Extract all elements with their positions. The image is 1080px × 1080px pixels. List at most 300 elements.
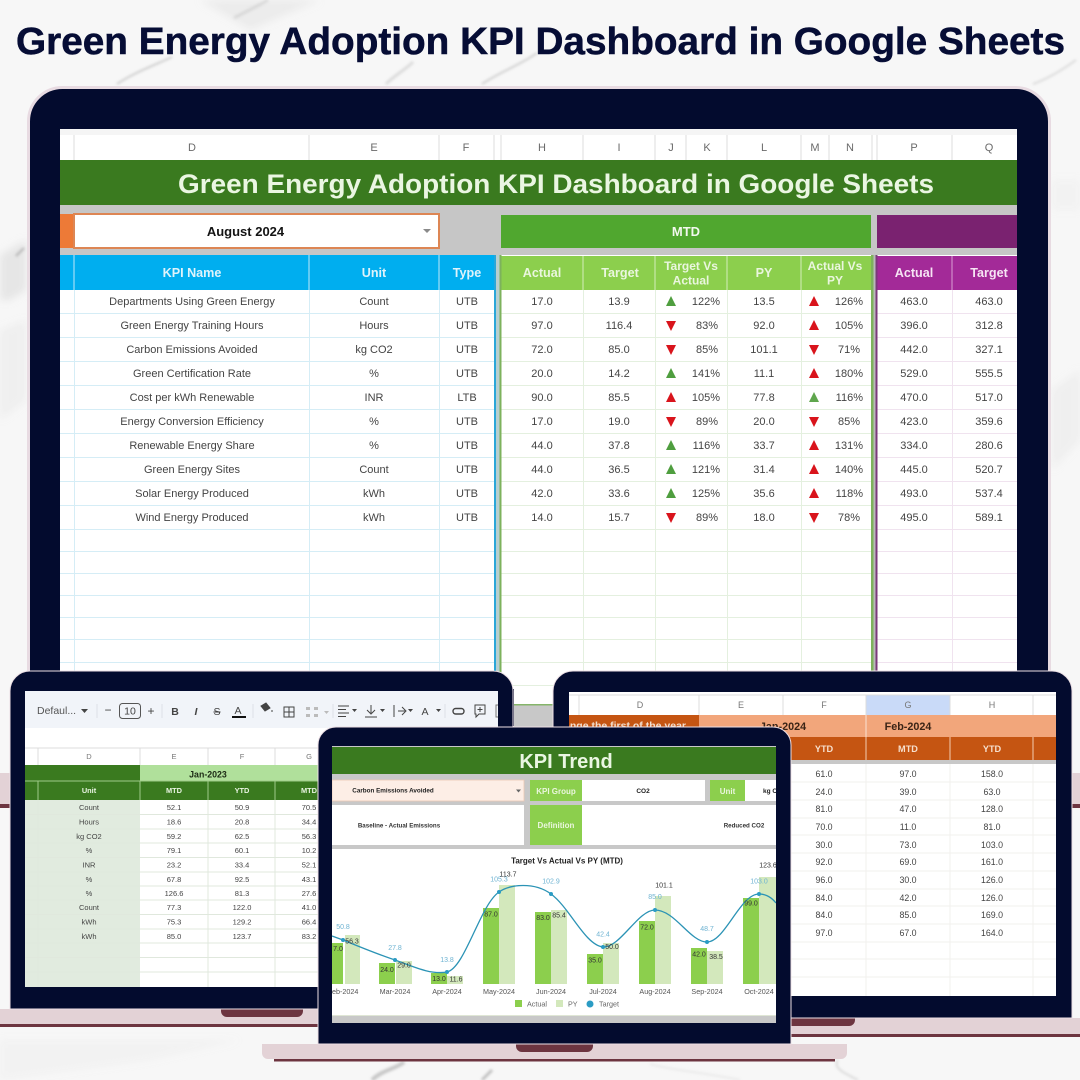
Jan YTD values: 60.1 xyxy=(235,846,249,855)
Feb YTD values: 158.0 xyxy=(981,769,1003,779)
target vs actual arrows xyxy=(666,296,676,523)
MTD actual column: 90.0 xyxy=(531,392,553,404)
KPI header xyxy=(60,255,495,290)
target vs actual percentages: 85% xyxy=(696,344,718,356)
actual vs PY percentages: 105% xyxy=(835,320,863,332)
actual and PY data labels: 123.6 xyxy=(759,862,777,870)
spreadsheet toolbar: S xyxy=(213,706,221,718)
target data labels xyxy=(336,876,768,964)
target line xyxy=(332,886,776,974)
unit values: kg CO2 xyxy=(76,832,102,841)
next month values: 56.3 xyxy=(302,832,316,841)
right laptop base xyxy=(775,1012,1080,1037)
KPI trend banner xyxy=(332,747,776,774)
MTD actual column: 42.0 xyxy=(531,488,553,500)
Feb MTD values: 47.0 xyxy=(899,804,917,814)
Jan MTD values: 77.3 xyxy=(167,903,181,912)
MTD target column: 33.6 xyxy=(608,488,630,500)
Jan MTD values: 18.6 xyxy=(167,818,181,826)
unit column: kg CO2 xyxy=(355,344,393,356)
actual bars xyxy=(332,898,759,984)
month axis labels: Jul-2024 xyxy=(589,987,617,996)
type column: UTB xyxy=(456,344,478,356)
laptop base strip behind main laptop xyxy=(0,773,1080,808)
chart legend xyxy=(515,1000,619,1008)
column letters row: I xyxy=(617,142,621,154)
PY bars xyxy=(345,877,776,984)
actual vs PY percentages: 118% xyxy=(836,488,863,500)
column letters: G xyxy=(306,752,312,761)
KPI names column: Cost per kWh Renewable xyxy=(130,392,254,404)
definition field: Definition xyxy=(538,821,575,830)
type column: UTB xyxy=(456,512,478,524)
actual and PY data labels: 99.0 xyxy=(744,900,758,908)
right table body xyxy=(569,764,1056,996)
left laptop xyxy=(10,671,513,1009)
unit field: kg CO2 xyxy=(763,788,786,795)
Feb YTD values: 81.0 xyxy=(983,822,1001,832)
MTD target column: 116.4 xyxy=(606,320,632,332)
PY column: 33.7 xyxy=(753,440,775,452)
spreadsheet toolbar: 10 xyxy=(124,706,136,718)
actual and PY data labels: 72.0 xyxy=(640,924,654,932)
KPI names column: Carbon Emissions Avoided xyxy=(126,344,258,356)
right bezel xyxy=(553,671,1072,1018)
PY column: 13.5 xyxy=(753,296,775,308)
MTD target column xyxy=(606,296,632,524)
KPI header: Unit xyxy=(362,266,387,280)
unit column: kWh xyxy=(363,488,385,500)
YTD header: Actual xyxy=(895,266,933,280)
type column xyxy=(456,296,478,524)
KPI group field: KPI Group xyxy=(536,787,576,796)
chart legend: Target xyxy=(599,1000,619,1008)
Jan YTD values: 30.0 xyxy=(815,840,833,850)
Jan YTD values: 123.7 xyxy=(233,932,251,941)
month header xyxy=(699,715,1056,737)
main laptop xyxy=(28,88,1050,729)
unit values: % xyxy=(86,889,93,898)
YTD actual column: 334.0 xyxy=(900,440,928,452)
Jan MTD values: 52.1 xyxy=(167,803,181,812)
target data labels: 42.4 xyxy=(596,932,610,938)
actual and PY data labels: 35.0 xyxy=(588,958,602,964)
type column: UTB xyxy=(456,416,478,428)
YTD actual column: 396.0 xyxy=(900,320,928,332)
Feb MTD values: 85.0 xyxy=(899,910,917,920)
actual vs PY percentages: 78% xyxy=(838,512,860,524)
unit values: Count xyxy=(79,803,100,812)
actual vs PY arrows xyxy=(809,296,819,523)
YTD actual column: 423.0 xyxy=(900,416,928,428)
YTD target column: 359.6 xyxy=(975,416,1003,428)
spreadsheet toolbar: Defaul... xyxy=(37,705,76,717)
type column: UTB xyxy=(456,440,478,452)
left table body xyxy=(25,800,318,987)
actual and PY data labels: 87.0 xyxy=(484,912,498,918)
main bezel xyxy=(28,88,1050,728)
KPI names column: Wind Energy Produced xyxy=(135,512,249,524)
unit column: INR xyxy=(365,392,384,404)
target data labels: 105.3 xyxy=(490,876,508,884)
column letters: F xyxy=(821,700,827,710)
KPI names column: Renewable Energy Share xyxy=(129,440,255,452)
chart legend: Actual xyxy=(527,1000,547,1008)
column header: Unit xyxy=(82,786,97,795)
actual vs PY percentages xyxy=(835,296,863,524)
page title: Green Energy Adoption KPI Dashboard in Google Sheets xyxy=(16,21,1065,63)
Feb MTD values: 67.0 xyxy=(899,928,917,938)
KPI group field: CO2 xyxy=(636,788,650,795)
actual and PY data labels: 42.0 xyxy=(692,952,706,958)
MTD target column: 19.0 xyxy=(608,416,630,428)
target vs actual percentages: 105% xyxy=(692,392,720,404)
target vs actual percentages: 141% xyxy=(692,368,720,380)
MTD target column: 85.5 xyxy=(608,392,630,404)
column header: MTD xyxy=(166,786,183,795)
MTD actual column: 17.0 xyxy=(531,416,553,428)
Jan MTD values: 23.2 xyxy=(167,860,181,870)
trend chart xyxy=(328,849,777,1016)
definition field: Reduced CO2 xyxy=(724,822,765,830)
actual and PY data labels: 24.0 xyxy=(380,967,394,974)
Jan YTD values: 92.5 xyxy=(235,875,249,884)
month axis labels: Mar-2024 xyxy=(380,987,410,996)
Jan YTD values: 81.3 xyxy=(235,889,249,898)
Feb MTD values: 97.0 xyxy=(899,769,917,779)
orange note cell: ange the first of the year xyxy=(564,720,686,732)
MTD target column: 85.0 xyxy=(608,344,630,356)
formula cell: Baseline - Actual Emissions xyxy=(358,822,441,830)
YTD target column: 589.1 xyxy=(975,512,1003,524)
Feb MTD values: 73.0 xyxy=(899,840,917,850)
PY column: 77.8 xyxy=(753,392,775,404)
actual and PY data labels: 13.0 xyxy=(432,976,446,983)
column letters: E xyxy=(738,700,744,710)
type column: UTB xyxy=(456,488,478,500)
actual and PY data labels: 29.0 xyxy=(397,962,411,970)
column letters row: P xyxy=(910,142,918,154)
type column: UTB xyxy=(456,368,478,380)
MTD header: Actual Vs xyxy=(808,259,863,273)
left screen sheet xyxy=(25,691,500,987)
month axis labels: Sep-2024 xyxy=(691,987,723,996)
actual vs PY percentages: 71% xyxy=(838,344,860,356)
column letters xyxy=(25,748,318,765)
YTD target column: 555.5 xyxy=(975,368,1003,380)
target data labels: 27.8 xyxy=(388,945,402,952)
KPI trend banner: KPI Trend xyxy=(519,751,613,773)
KPI trend screen xyxy=(328,746,786,1023)
column header: MTD xyxy=(301,786,318,795)
MTD actual column: 20.0 xyxy=(531,368,553,380)
column header: YTD xyxy=(815,744,834,754)
unit values: kWh xyxy=(82,918,96,926)
Feb YTD values: 126.0 xyxy=(981,893,1003,903)
column letters row: J xyxy=(668,142,674,154)
Feb YTD values: 126.0 xyxy=(981,875,1003,885)
left laptop base xyxy=(0,1003,330,1027)
month axis labels xyxy=(328,987,774,996)
target data labels: 48.7 xyxy=(700,926,714,933)
MTD band xyxy=(501,215,871,248)
actual and PY data labels: 83.0 xyxy=(536,915,550,922)
Jan MTD values: 126.6 xyxy=(165,889,183,898)
actual and PY data labels: 56.3 xyxy=(345,938,359,946)
Jan YTD values: 61.0 xyxy=(815,769,833,779)
target data labels: 50.8 xyxy=(336,924,350,931)
KPI names column: Solar Energy Produced xyxy=(135,488,249,500)
actual vs PY percentages: 116% xyxy=(836,392,863,404)
month axis labels: Feb-2024 xyxy=(328,987,358,996)
MTD header xyxy=(501,256,871,290)
PY column: 20.0 xyxy=(753,416,775,428)
actual vs PY percentages: 85% xyxy=(838,416,860,428)
KPI header: Type xyxy=(453,266,481,280)
unit field: Unit xyxy=(720,787,736,796)
Feb YTD values: 164.0 xyxy=(981,928,1003,938)
center bezel xyxy=(318,727,791,1044)
Feb MTD values: 42.0 xyxy=(899,893,917,903)
YTD actual column: 493.0 xyxy=(900,488,928,500)
column letters xyxy=(569,695,1056,715)
MTD target column: 14.2 xyxy=(608,368,630,380)
next month values: 83.2 xyxy=(302,932,316,941)
column letters row: H xyxy=(538,142,546,154)
MTD header: Target Vs xyxy=(664,259,718,273)
Feb MTD values: 30.0 xyxy=(899,875,917,885)
YTD actual column: 495.0 xyxy=(900,512,928,524)
target data labels: 13.8 xyxy=(440,957,454,964)
type column: UTB xyxy=(456,464,478,476)
month axis labels: Apr-2024 xyxy=(432,987,462,996)
KPI names column xyxy=(109,296,275,524)
PY column: 35.6 xyxy=(753,488,775,500)
unit column: % xyxy=(369,368,379,380)
MTD header: Actual xyxy=(673,274,709,288)
unit column: % xyxy=(369,416,379,428)
KPI group field xyxy=(530,780,705,801)
column letters row: Q xyxy=(985,142,994,154)
Jan YTD values xyxy=(815,769,833,938)
PY column: 92.0 xyxy=(753,320,775,332)
type column: UTB xyxy=(456,320,478,332)
month selector xyxy=(60,214,439,248)
right screen sheet xyxy=(564,692,1056,996)
Jan MTD values: 67.8 xyxy=(167,875,181,884)
actual and PY data labels: 85.4 xyxy=(552,912,566,920)
KPI names column: Green Certification Rate xyxy=(133,368,251,380)
YTD actual column: 463.0 xyxy=(900,296,928,308)
Jan YTD values xyxy=(233,803,251,941)
MTD actual column: 72.0 xyxy=(531,344,553,356)
target vs actual percentages: 125% xyxy=(692,488,720,500)
month axis labels: Oct-2024 xyxy=(744,987,774,996)
Jan YTD values: 96.0 xyxy=(815,875,833,885)
YTD header: Target xyxy=(970,266,1009,280)
unit values: % xyxy=(86,846,93,855)
Jan YTD values: 129.2 xyxy=(233,918,251,926)
column header: YTD xyxy=(235,786,250,795)
target vs actual percentages: 121% xyxy=(692,464,720,476)
MTD actual column: 44.0 xyxy=(531,464,553,476)
column letters: H xyxy=(989,700,995,710)
Feb MTD values: 11.0 xyxy=(900,822,916,832)
target data labels: 103.0 xyxy=(750,878,768,886)
MTD target column: 15.7 xyxy=(608,512,630,524)
target vs actual percentages xyxy=(692,296,720,524)
target vs actual percentages: 116% xyxy=(693,440,720,452)
next month values: 43.1 xyxy=(302,875,316,884)
right laptop xyxy=(553,671,1072,1018)
center laptop xyxy=(318,727,791,1044)
actual and PY data labels: 38.5 xyxy=(709,954,723,961)
YTD actual column: 529.0 xyxy=(900,368,928,380)
actual vs PY percentages: 140% xyxy=(835,464,863,476)
next month values: 52.1 xyxy=(302,860,316,870)
unit column: % xyxy=(369,440,379,452)
unit field xyxy=(710,780,786,801)
type column: UTB xyxy=(456,296,478,308)
column letters row: M xyxy=(810,142,820,154)
unit values: kWh xyxy=(82,932,96,941)
column letters: D xyxy=(637,700,644,710)
month axis labels: May-2024 xyxy=(483,987,515,996)
month axis labels: Jun-2024 xyxy=(536,987,566,996)
YTD target column: 520.7 xyxy=(975,464,1003,476)
next month values: 27.6 xyxy=(302,889,316,898)
KPI selector: Carbon Emissions Avoided xyxy=(352,788,434,794)
unit column: kWh xyxy=(363,512,385,524)
MTD actual column: 97.0 xyxy=(531,320,553,332)
unit values: % xyxy=(86,875,93,884)
MTD actual column xyxy=(531,296,553,524)
column letters row: E xyxy=(370,142,378,154)
column letters: D xyxy=(86,752,92,761)
month header: Feb-2024 xyxy=(885,721,931,733)
Jan YTD values: 20.8 xyxy=(235,818,249,826)
MTD actual column: 17.0 xyxy=(531,296,553,308)
Jan YTD values: 50.9 xyxy=(235,803,249,812)
unit column: Hours xyxy=(359,320,389,332)
chart legend: PY xyxy=(568,1000,578,1008)
target data labels: 102.9 xyxy=(542,878,560,886)
next month values: 70.5 xyxy=(302,803,316,812)
column header: MTD xyxy=(731,744,751,754)
KPI names column: Green Energy Training Hours xyxy=(120,320,264,332)
type column: LTB xyxy=(457,392,477,404)
column letters row: K xyxy=(703,142,711,154)
month header: Jan-2023 xyxy=(189,770,227,780)
unit values: Count xyxy=(79,903,100,912)
MTD actual column: 44.0 xyxy=(531,440,553,452)
month header xyxy=(25,765,318,780)
actual vs PY percentages: 126% xyxy=(835,296,863,308)
column header: YTD xyxy=(983,744,1002,754)
MTD target column: 36.5 xyxy=(608,464,630,476)
KPI names column: Energy Conversion Efficiency xyxy=(120,416,264,428)
column letters: G xyxy=(904,700,912,710)
chart title: Target Vs Actual Vs PY (MTD) xyxy=(511,856,623,866)
PY column: 11.1 xyxy=(754,368,774,380)
column header xyxy=(790,737,1056,760)
grid lines xyxy=(60,290,1017,690)
spreadsheet toolbar xyxy=(25,691,500,728)
center laptop base xyxy=(262,1038,847,1062)
next month values: 41.0 xyxy=(302,903,316,912)
YTD target column xyxy=(975,296,1003,524)
column letters row: F xyxy=(463,142,470,154)
actual and PY data labels: 113.7 xyxy=(500,872,517,878)
YTD target column: 463.0 xyxy=(975,296,1003,308)
actual and PY data labels: 50.0 xyxy=(605,944,619,951)
KPI names column: Departments Using Green Energy xyxy=(109,296,275,308)
Feb MTD values: 39.0 xyxy=(899,787,917,797)
Feb YTD values xyxy=(981,769,1003,938)
Jan YTD values: 122.0 xyxy=(233,903,251,912)
Jan YTD values: 70.0 xyxy=(815,822,833,832)
column header xyxy=(25,780,318,800)
target vs actual percentages: 89% xyxy=(696,416,718,428)
unit values: Hours xyxy=(79,818,99,826)
Jan YTD values: 92.0 xyxy=(815,857,833,867)
YTD target column: 327.1 xyxy=(975,344,1003,356)
column letters row: N xyxy=(846,142,854,154)
left bezel xyxy=(10,671,513,1009)
column letters row: D xyxy=(188,142,196,154)
actual and PY data labels xyxy=(333,862,777,984)
YTD actual column: 470.0 xyxy=(900,392,928,404)
YTD target column: 517.0 xyxy=(975,392,1003,404)
column letters row xyxy=(74,135,994,160)
month selector: August 2024 xyxy=(207,224,285,239)
YTD target column: 537.4 xyxy=(975,488,1003,500)
next month values: 10.2 xyxy=(302,846,316,855)
spreadsheet toolbar: − xyxy=(104,703,112,717)
unit column xyxy=(355,296,393,524)
unit column: Count xyxy=(359,464,389,476)
MTD actual column: 14.0 xyxy=(531,512,553,524)
Feb YTD values: 161.0 xyxy=(981,857,1003,867)
Jan YTD values: 62.5 xyxy=(235,832,249,841)
YTD target column: 312.8 xyxy=(975,320,1003,332)
Feb YTD values: 169.0 xyxy=(981,910,1003,920)
PY column xyxy=(750,296,778,524)
Feb YTD values: 103.0 xyxy=(981,840,1003,850)
MTD target column: 13.9 xyxy=(608,296,630,308)
spreadsheet toolbar: I xyxy=(195,706,199,718)
actual and PY data labels: 101.1 xyxy=(655,882,673,890)
actual and PY data labels: 7.0 xyxy=(333,946,343,953)
column letters row: L xyxy=(761,142,767,154)
dashboard title banner xyxy=(60,160,1017,205)
KPI names column: Green Energy Sites xyxy=(144,464,240,476)
actual vs PY percentages: 131% xyxy=(835,440,863,452)
PY column: 101.1 xyxy=(750,344,778,356)
column header: MTD xyxy=(898,744,918,754)
actual vs PY percentages: 180% xyxy=(835,368,863,380)
actual and PY data labels: 11.6 xyxy=(449,976,463,984)
definition field xyxy=(530,805,776,845)
next month values: 66.4 xyxy=(302,918,316,926)
KPI selector xyxy=(332,780,524,801)
Jan MTD values xyxy=(165,803,183,941)
Jan MTD values: 79.1 xyxy=(167,846,181,855)
column letters: F xyxy=(240,752,245,761)
formula cell xyxy=(332,805,524,845)
YTD actual column xyxy=(900,296,928,524)
main dashboard screen xyxy=(60,129,1017,690)
